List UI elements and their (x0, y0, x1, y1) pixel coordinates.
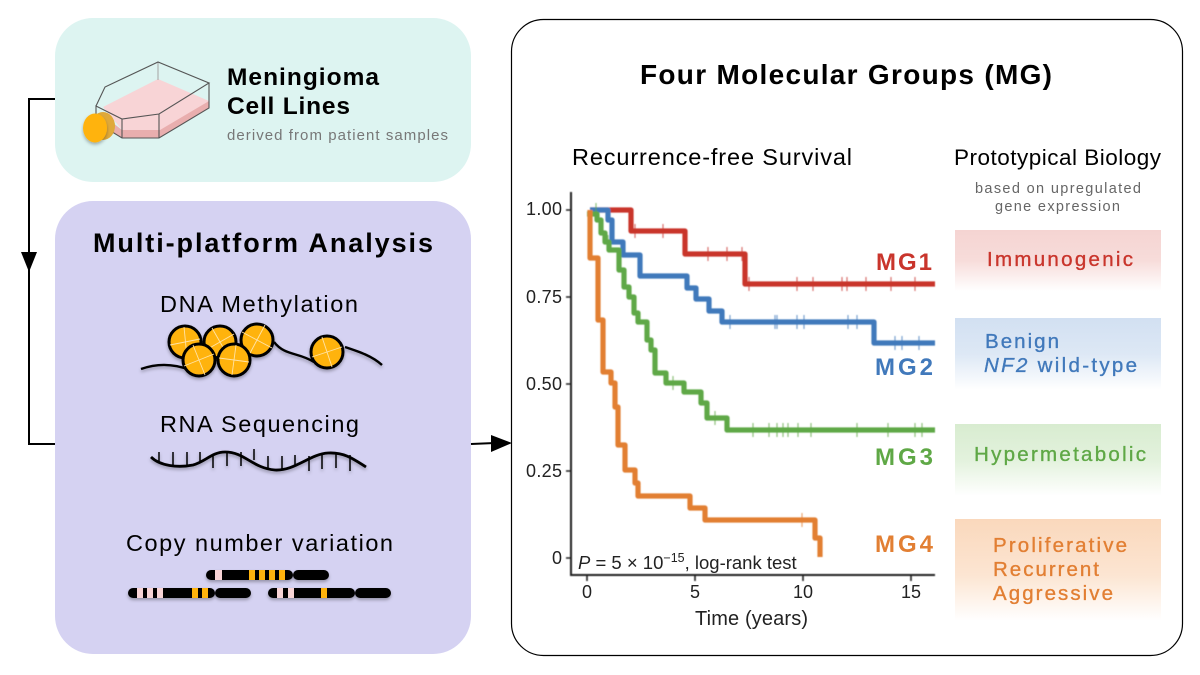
label: MG3: MG3 (875, 444, 933, 471)
x axis labels: Time (years) (695, 608, 808, 630)
heading: multi-platform analysis: Multi-platform Analysis (93, 228, 433, 258)
box: hypermetabolic (955, 424, 1161, 496)
icon: RNA strand (151, 449, 366, 471)
heading: recurrence-free survival: Recurrence-free Survival (572, 144, 852, 170)
heading: cell lines: Cell Lines (227, 93, 350, 120)
box: benign NF2 wild-type (955, 318, 1161, 390)
box: proliferative recurrent aggressive (955, 519, 1161, 621)
x axis labels: 15 (901, 582, 921, 602)
y axis labels: 0.25 (526, 461, 562, 481)
box: proliferative recurrent aggressive: Proliferative (993, 534, 1127, 557)
text: based on upregulated gene expression: gene expression (995, 199, 1120, 215)
y axis labels: 0 (552, 548, 562, 568)
x axis labels: 0 (582, 582, 592, 602)
box: immunogenic (955, 230, 1161, 291)
panel: four molecular groups (512, 20, 1182, 656)
y axis labels: 1.00 (526, 199, 562, 219)
y axis labels: 0.75 (526, 287, 562, 307)
y axis labels (526, 199, 562, 568)
annotation: p value: P = 5 × 10 (578, 552, 663, 573)
curve: MG2 (590, 210, 935, 350)
x axis labels (582, 582, 921, 630)
text: derived from patient samples: derived from patient samples (227, 127, 448, 144)
curve: MG1 (590, 210, 935, 291)
panel: meningioma cell lines (55, 18, 471, 182)
text: based on upregulated gene expression (975, 181, 1141, 215)
annotation: p value: −15 (663, 551, 685, 565)
arrow: analysis to molecular groups (471, 435, 512, 452)
label: copy number variation: Copy number variation (126, 530, 393, 556)
icon: chromosomes (128, 570, 391, 598)
title: Four Molecular Groups (MG) (640, 59, 1052, 90)
label: RNA sequencing: RNA Sequencing (160, 411, 359, 437)
label: MG4: MG4 (875, 531, 934, 558)
annotation: p value: , log-rank test (685, 552, 797, 573)
curve: MG4 (590, 210, 820, 557)
heading: meningioma: Meningioma (227, 64, 379, 91)
x axis labels: 5 (690, 582, 700, 602)
curve: MG3 (587, 203, 935, 437)
box: proliferative recurrent aggressive: Aggressive (993, 582, 1113, 605)
x axis labels: 10 (793, 582, 813, 602)
text: based on upregulated gene expression: based on upregulated (975, 181, 1141, 197)
box: benign NF2 wild-type: Benign (985, 330, 1059, 353)
box: immunogenic: Immunogenic (987, 248, 1133, 271)
label: DNA methylation: DNA Methylation (160, 291, 358, 317)
icon: nucleosomes on DNA (141, 324, 382, 376)
icon: culture flask (83, 62, 209, 142)
panel: multi-platform analysis (55, 201, 471, 654)
box: proliferative recurrent aggressive: Recurrent (993, 558, 1099, 581)
chart: Kaplan-Meier survival curves (526, 192, 935, 630)
label: MG2: MG2 (875, 354, 933, 381)
box: benign NF2 wild-type: NF2 wild-type (984, 354, 1137, 377)
box: hypermetabolic: Hypermetabolic (974, 443, 1146, 466)
heading: prototypical biology: Prototypical Biology (954, 145, 1162, 170)
arrow: feedback connector (21, 99, 55, 444)
y axis labels: 0.50 (526, 374, 562, 394)
label: MG1: MG1 (876, 249, 932, 276)
